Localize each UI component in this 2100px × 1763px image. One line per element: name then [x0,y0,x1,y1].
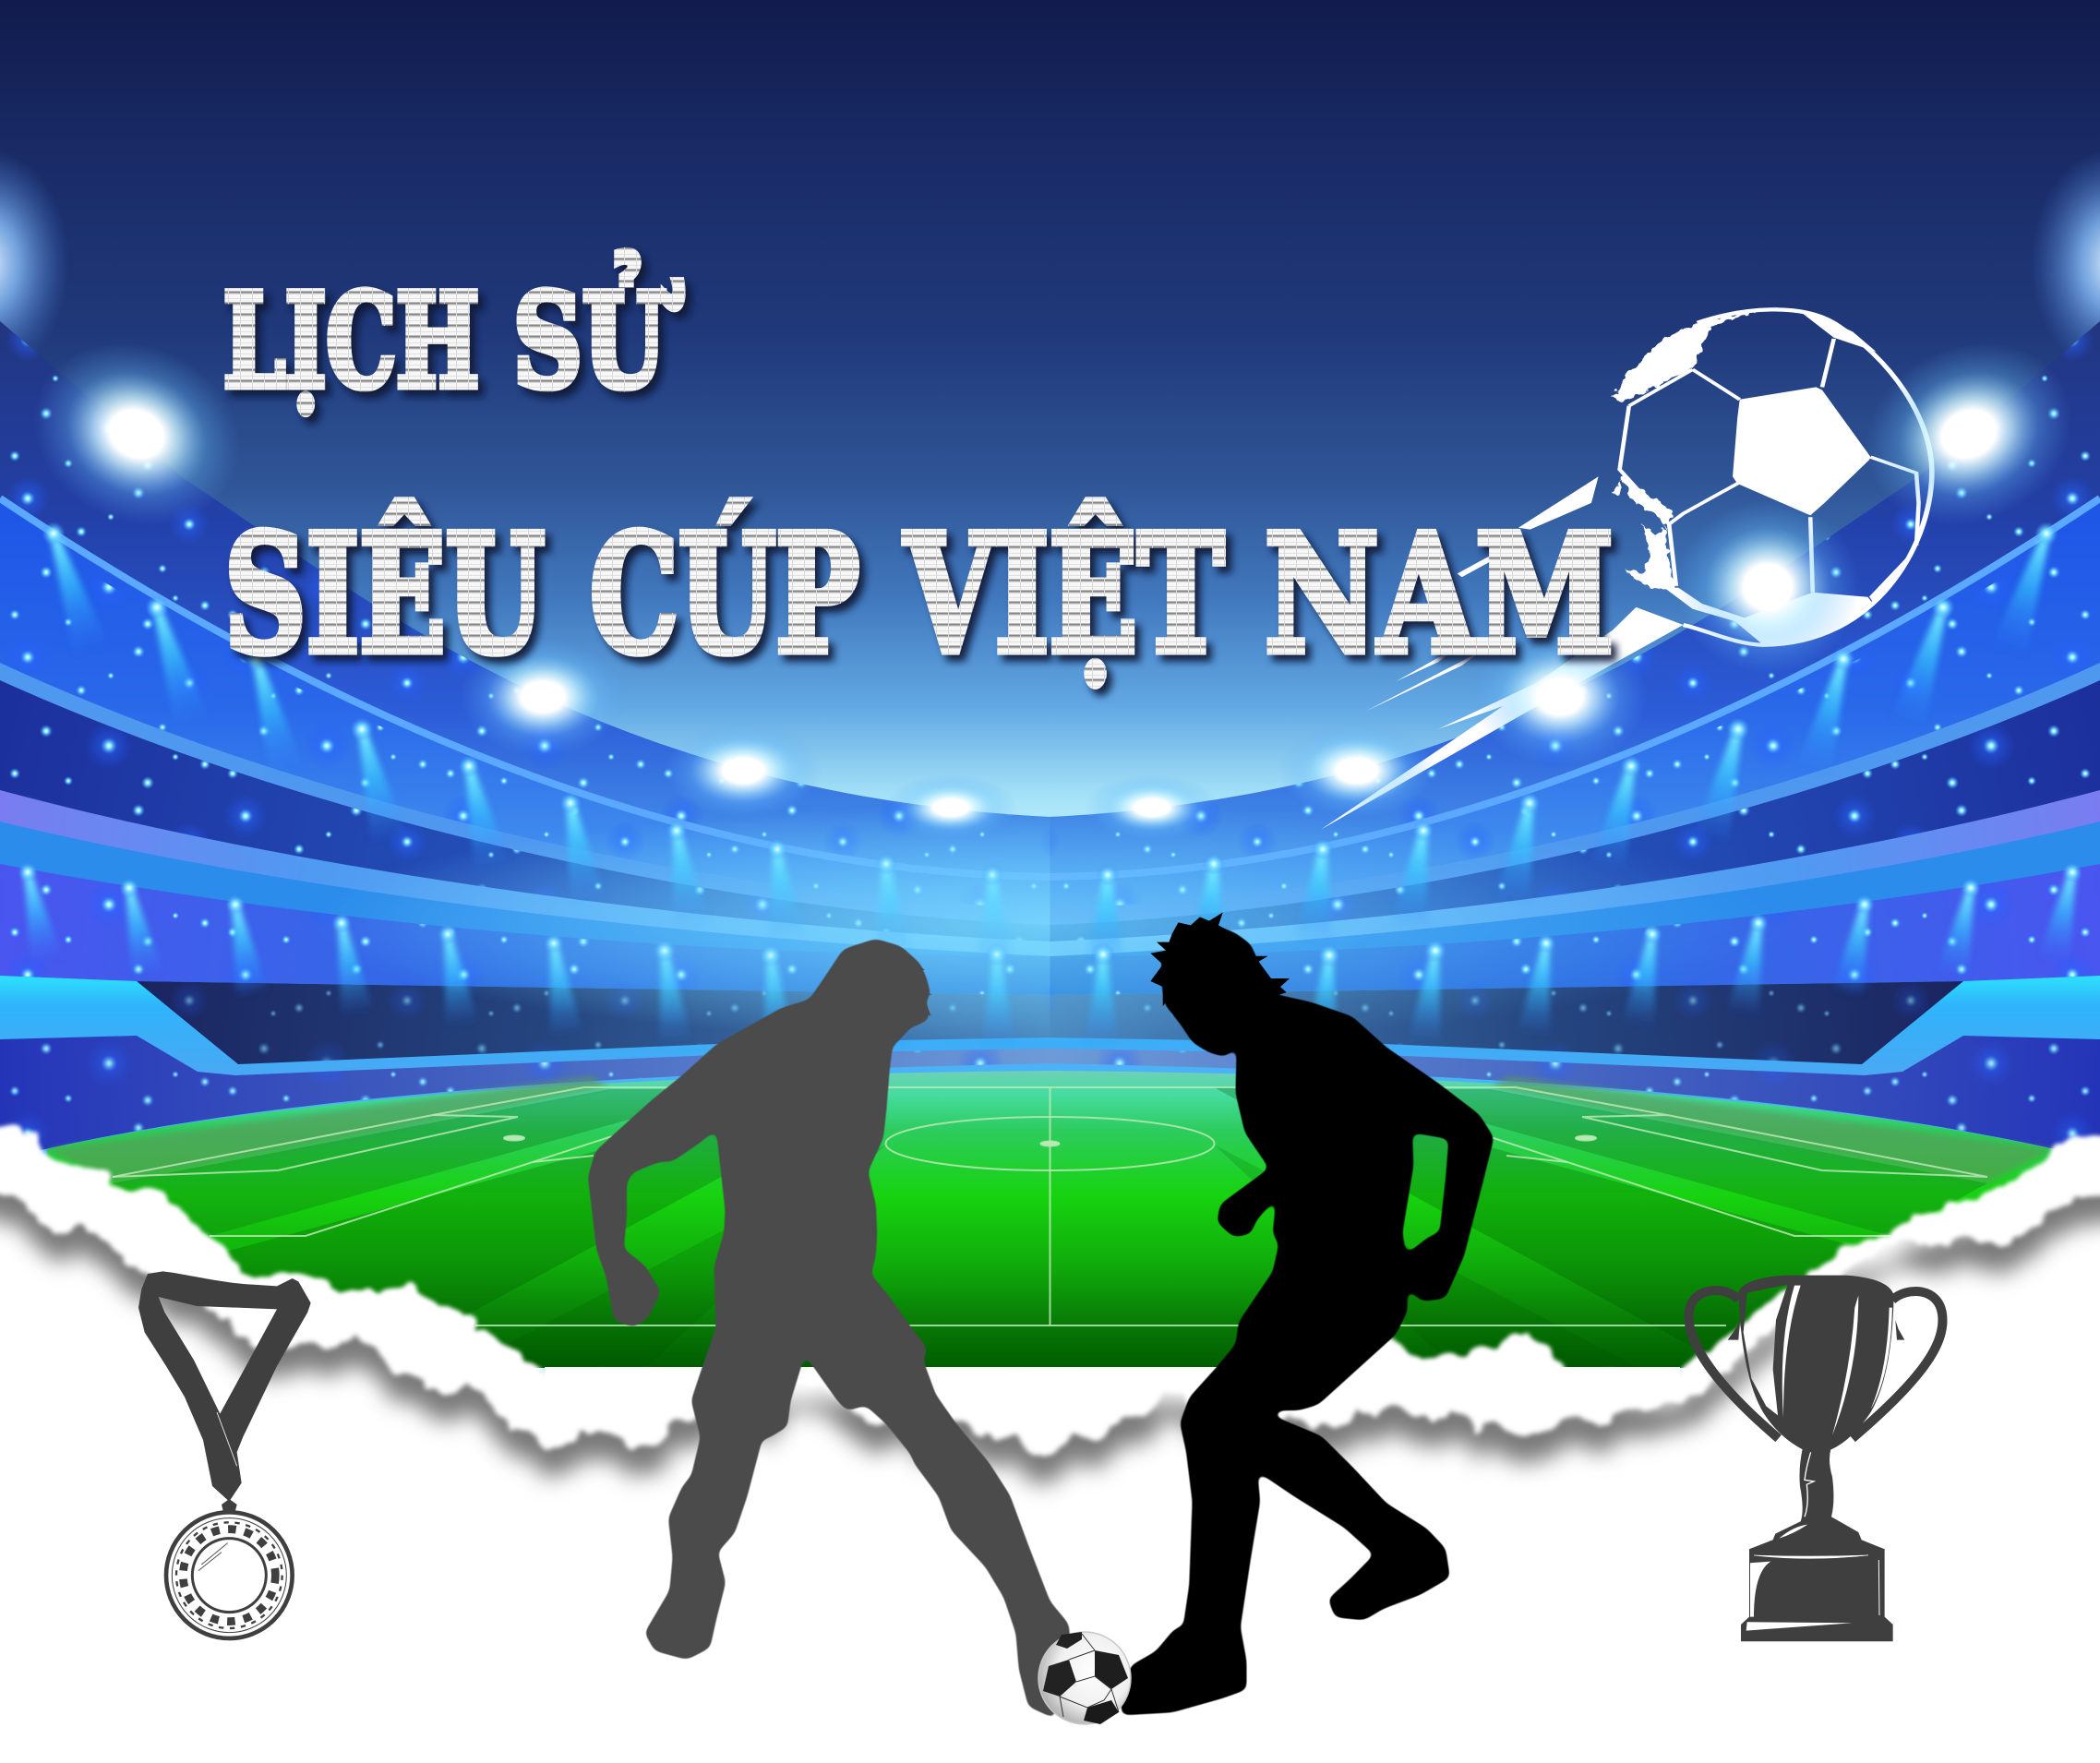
glow: right corner floodlight [2031,148,2100,378]
ball outline [1683,309,1932,645]
pitch markings [113,1087,1987,1325]
title: LỊCH SỬ / SIÊU CÚP VIỆT NAM: CÚP [590,500,859,690]
trophy cup [1738,1276,1894,1450]
pitch [47,1071,2053,1368]
stadium: right half of stands (mirror) [312,321,2100,1200]
floodlights (right) [1086,309,2100,841]
title: LỊCH SỬ / SIÊU CÚP VIỆT NAM: SỬ [513,252,682,416]
torn paper: white lower area [0,1124,2100,1763]
torn paper: white flap with jagged edge [0,1124,2100,1459]
stadium: left half of stands [0,321,1789,1200]
title: LỊCH SỬ / SIÊU CÚP VIỆT NAM: LỊCH [223,265,479,416]
speed streaks [1321,476,1683,830]
glow: left corner floodlight [0,148,69,378]
ball seams [1620,339,1919,593]
white paper strip under flat pitch edge [545,1367,1680,1383]
title: LỊCH SỬ / SIÊU CÚP VIỆT NAM [223,252,1614,690]
medal ribbon [138,1271,311,1502]
trophy stem and base [1741,1449,1893,1641]
small football at the players' feet [1038,1632,1131,1724]
hair spikes [1150,912,1290,1006]
upper row of spotlight beams [36,528,1014,964]
medal disc with wreath [166,1512,293,1638]
streak glow [1472,628,1648,766]
torn left fringe of the ball [1613,307,1772,592]
torn paper: shadow under flap [0,1152,2100,1487]
centre stand glow [312,803,1789,1043]
player silhouette: grey [590,941,1068,1717]
title: LỊCH SỬ / SIÊU CÚP VIỆT NAM: NAM [1265,500,1614,690]
title: LỊCH SỬ / SIÊU CÚP VIỆT NAM: SIÊU [224,500,545,690]
big football with speed streaks [1321,307,1932,830]
trophy [1689,1276,1942,1641]
floodlights (left) [4,309,1017,841]
spotlight lamps on the stand rims [18,522,1009,968]
player silhouette: black [1122,912,1493,1714]
ball floodlight glow [1675,499,1860,675]
medal [138,1271,311,1638]
trophy handles [1689,1290,1942,1438]
title: LỊCH SỬ / SIÊU CÚP VIỆT NAM: VIỆT [904,500,1224,690]
lower row of spotlight beams [11,869,1015,1049]
